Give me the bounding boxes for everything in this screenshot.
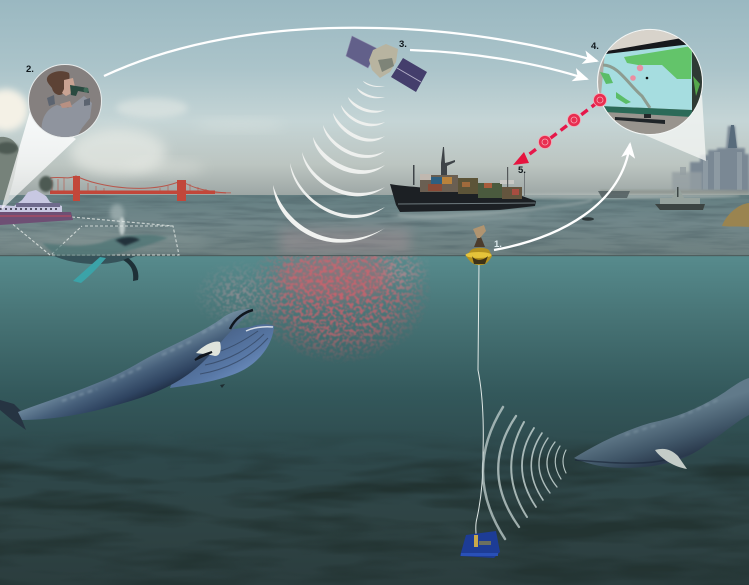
- red dashed alert arrow: [513, 94, 606, 165]
- mouth line: [230, 310, 253, 329]
- alert target 3: [538, 136, 552, 148]
- map screen: [600, 44, 692, 110]
- callout cone: observer: [1, 108, 76, 210]
- background: sky: [0, 0, 749, 196]
- background: sea surface: [0, 193, 749, 256]
- arrow: satellite to monitor: [410, 50, 587, 79]
- arrow: observer to monitor: [104, 28, 597, 76]
- ship bridge and mast: [441, 147, 455, 175]
- person: hair: [47, 71, 70, 95]
- monitor frame: [606, 38, 692, 54]
- ship wake: [398, 200, 592, 217]
- label 1: 1.: [494, 239, 502, 250]
- whale watching viewing zone: [10, 217, 179, 255]
- buoy: [466, 225, 492, 265]
- back mottling: [62, 319, 228, 401]
- hydrophone sound waves: [483, 407, 566, 539]
- label 3: 3.: [399, 39, 407, 50]
- callout cone: monitor: [640, 95, 706, 161]
- callout: observer with binoculars: [28, 64, 102, 138]
- arrow: buoy to monitor: [494, 144, 630, 250]
- whale blow spout: [110, 204, 125, 235]
- throat pouch: [170, 324, 274, 388]
- satellite: [346, 36, 427, 92]
- surfacing whale: [42, 235, 168, 283]
- left headland with trees: [0, 137, 53, 200]
- body: [574, 378, 749, 468]
- body: [18, 309, 253, 420]
- mooring line: [476, 262, 483, 534]
- line at the water surface: [0, 255, 749, 256]
- container ship: [390, 147, 592, 217]
- alert target 1: [594, 94, 606, 106]
- feeding whale: [0, 309, 274, 430]
- binoculars: [70, 85, 89, 96]
- person: jacket: [42, 96, 92, 137]
- label 2: 2.: [26, 64, 34, 75]
- lower jaw: [575, 460, 665, 463]
- containers: [420, 174, 522, 199]
- map land: [624, 46, 692, 79]
- satellite body: [369, 44, 398, 78]
- solar panel left: [346, 36, 378, 68]
- patrol boat: [655, 187, 705, 210]
- tail fluke: [0, 400, 26, 430]
- person: face and hands: [62, 78, 75, 96]
- krill cloud: [200, 256, 428, 361]
- background: underwater: [0, 256, 749, 585]
- shipping lane: [603, 65, 650, 108]
- label 5: 5.: [518, 165, 526, 176]
- small dark boat: [582, 217, 594, 221]
- label 4: 4.: [591, 41, 599, 52]
- ship hull: [390, 184, 536, 212]
- singing whale: [574, 378, 749, 469]
- skyline: [600, 125, 749, 194]
- hydrophone mooring base: [460, 531, 500, 558]
- distant ship: [598, 191, 630, 198]
- golden gate bridge: [50, 176, 231, 201]
- rock: [722, 203, 749, 227]
- seafloor shading: [0, 430, 749, 585]
- alert target 2: [568, 114, 580, 126]
- back mottling: [625, 399, 720, 435]
- pectoral fin: [655, 449, 687, 469]
- tour boat: [0, 190, 73, 225]
- satellite signal waves: [273, 81, 385, 243]
- clouds: [0, 89, 285, 176]
- pectoral fin: [196, 342, 221, 356]
- callout: monitor with whale map: [597, 28, 704, 136]
- whale detection spots: [637, 65, 643, 71]
- solar panel right: [391, 58, 427, 92]
